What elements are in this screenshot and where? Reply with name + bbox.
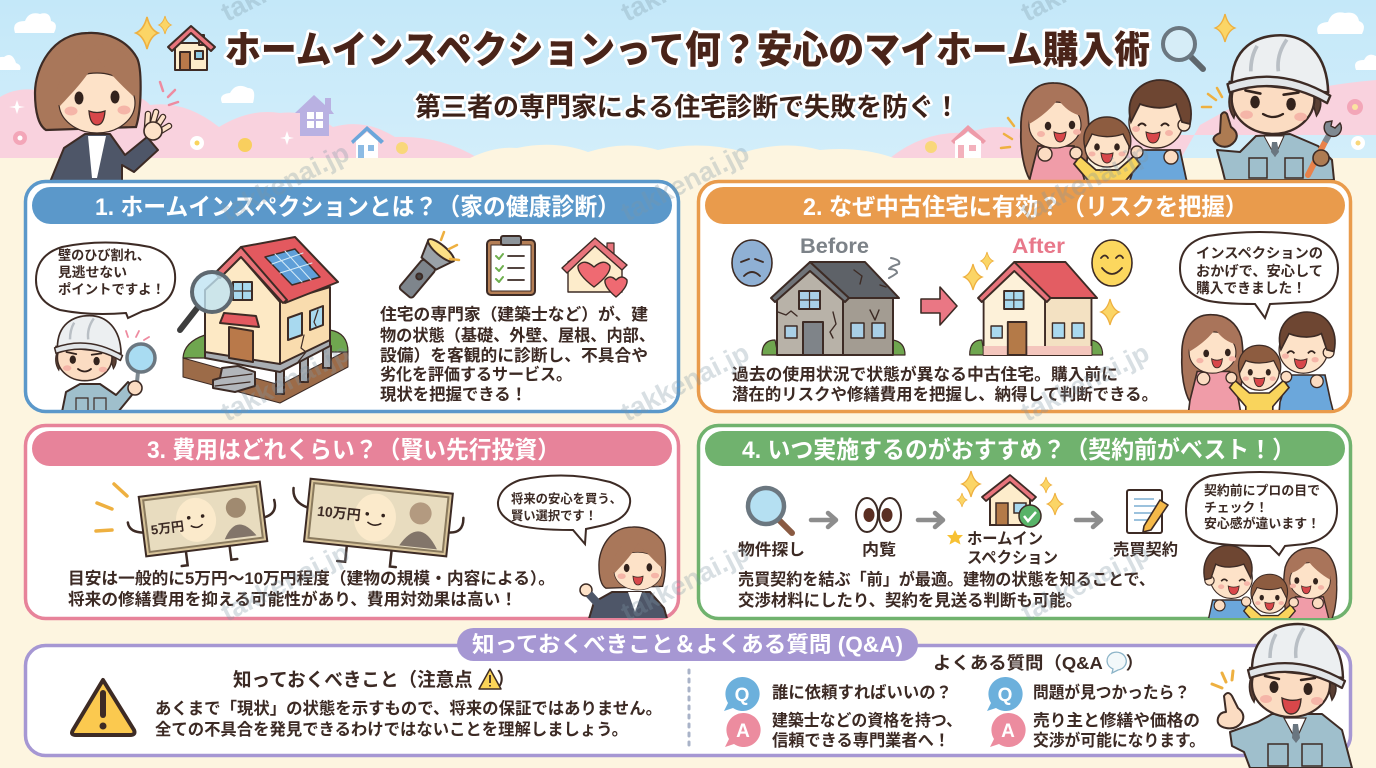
speech bubble: check before contract: チェック！ bbox=[1204, 500, 1268, 515]
notes text: あくまで「現状」の状態を示すもので、将来の保証ではありません。 bbox=[155, 699, 662, 718]
panel 4 heading bbox=[705, 431, 1345, 466]
speech bubble: purchased with confidence: おかげで、安心して bbox=[1196, 263, 1323, 279]
watermarks bbox=[216, 0, 1154, 627]
icon: magnifier by title bbox=[1163, 28, 1203, 69]
background house: blue bbox=[351, 126, 384, 158]
arrow 2 bbox=[918, 513, 943, 527]
panel 2 description text bbox=[732, 364, 1158, 404]
speech bubble: wise choice: 将来の安心を買う、 bbox=[511, 491, 622, 506]
watermarks: takkenai.jp bbox=[216, 337, 354, 427]
Q and A 2: Q bbox=[998, 685, 1012, 706]
banknote character: 100,000 yen bbox=[286, 477, 466, 574]
panel 2 heading: 2. なぜ中古住宅に有効？（リスクを把握） bbox=[803, 194, 1248, 221]
panel 3 heading bbox=[32, 431, 672, 466]
panel 1 description text: 現状を把握できる！ bbox=[380, 385, 527, 404]
subtitle: 第三者の専門家による住宅診断で失敗を防ぐ！ bbox=[415, 92, 960, 122]
character: inspector top right bbox=[1202, 35, 1341, 180]
banknote character: 50,000 yen: 5万円 bbox=[150, 519, 185, 538]
Q and A 2 bbox=[987, 677, 1205, 750]
speech bubble: cracks: 見逃せない bbox=[58, 264, 127, 280]
character: woman presenter bbox=[35, 33, 178, 182]
icon: house with hearts bbox=[562, 238, 627, 297]
speech bubble: cracks bbox=[36, 242, 175, 318]
panel 4 description text: 売買契約を結ぶ「前」が最適。建物の状態を知ることで、 bbox=[738, 569, 1155, 589]
character: inspector with magnifier bbox=[55, 316, 155, 412]
speech bubble: check before contract bbox=[1186, 472, 1337, 555]
watermarks: takkenai.jp bbox=[1016, 337, 1154, 427]
flow labels: 売買契約 bbox=[1113, 540, 1178, 559]
arrow 1 bbox=[811, 513, 836, 527]
panel 3 heading: 3. 費用はどれくらい？（賢い先行投資） bbox=[147, 437, 560, 464]
watermarks: takkenai.jp bbox=[616, 537, 754, 627]
character: woman in panel 3 bbox=[580, 527, 668, 622]
panel 1 description text: 物の状態（基礎、外壁、屋根、内部、 bbox=[380, 326, 655, 345]
panel 4 heading: 4. いつ実施するのがおすすめ？（契約前がベスト！） bbox=[742, 436, 1295, 464]
panel 1: what is home inspection bbox=[26, 182, 678, 412]
speech bubble: purchased with confidence: 購入できました！ bbox=[1196, 280, 1306, 296]
dotted divider bbox=[688, 670, 690, 746]
before label: Before bbox=[800, 235, 869, 258]
Q and A 2: 売り主と修繕や価格の bbox=[1033, 711, 1200, 730]
panel 4: when to do it bbox=[696, 424, 1352, 620]
sad face bbox=[732, 240, 772, 286]
panel 2: why effective for used homes bbox=[698, 182, 1350, 442]
speech bubble: purchased with confidence: インスペクションの bbox=[1196, 245, 1323, 261]
panel 1 heading: 1. ホームインスペクションとは？（家の健康診断） bbox=[95, 194, 620, 221]
icon: large warning triangle bbox=[72, 680, 134, 735]
watermarks: takkenai.jp bbox=[216, 137, 354, 227]
notes text: 全ての不具合を発見できるわけではないことを理解しましょう。 bbox=[155, 719, 628, 739]
panel 5 tab heading bbox=[457, 628, 918, 661]
icon: magnifier search bbox=[748, 488, 792, 533]
watermarks: takkenai.jp bbox=[1016, 537, 1154, 627]
notes text bbox=[155, 699, 662, 739]
character: family in panel 2 bbox=[1180, 311, 1336, 410]
icon: house by title bbox=[168, 26, 215, 70]
Q and A 1 bbox=[724, 677, 962, 750]
arrow: before to after bbox=[921, 287, 957, 325]
panel 1 description text: 設備）を客観的に診断し、不具合や bbox=[380, 345, 648, 365]
house after bbox=[970, 262, 1103, 355]
Q and A 1: Q bbox=[735, 685, 749, 706]
Q and A 1: 建築士などの資格を持つ、 bbox=[772, 710, 962, 730]
banknote character: 100,000 yen: 10万円 bbox=[316, 503, 362, 523]
character: family in panel 4 bbox=[1203, 545, 1338, 618]
flow labels: ホームイン bbox=[967, 530, 1043, 548]
Q and A 2: 問題が見つかったら？ bbox=[1033, 682, 1190, 702]
watermarks: takkenai.jp bbox=[616, 337, 754, 427]
panel 2 description text: 過去の使用状況で状態が異なる中古住宅。購入前に bbox=[732, 364, 1118, 384]
watermarks: takkenai.jp bbox=[1016, 137, 1154, 227]
Q and A 1: 信頼できる専門業者へ！ bbox=[772, 731, 950, 750]
background house: pink bbox=[951, 125, 986, 158]
speech bubble: wise choice: 賢い選択です！ bbox=[511, 508, 597, 523]
flow labels: 物件探し bbox=[738, 541, 805, 559]
character: family top right bbox=[1001, 80, 1198, 225]
speech bubble: purchased with confidence bbox=[1180, 232, 1338, 318]
panel 3 description text bbox=[68, 568, 555, 609]
icon: inspected house with check bbox=[957, 471, 1063, 527]
icon: checklist clipboard bbox=[487, 236, 535, 295]
happy face bbox=[1092, 240, 1132, 286]
icon: eyes bbox=[856, 498, 901, 532]
panel 3 description text: 将来の修繕費用を抑える可能性があり、費用対効果は高い！ bbox=[68, 589, 517, 609]
panel 1 description text bbox=[380, 304, 655, 404]
panel 3 description text: 目安は一般的に5万円〜10万円程度（建物の規模・内容による）。 bbox=[68, 568, 555, 588]
panel 4 description text: 交渉材料にしたり、契約を見送る判断も可能。 bbox=[738, 590, 1082, 610]
after label: After bbox=[1012, 235, 1065, 258]
title: ホームインスペクションって何？安心のマイホーム購入術 bbox=[225, 30, 1150, 72]
speech bubble: check before contract: 契約前にプロの目で bbox=[1204, 483, 1320, 498]
sparkles left of title bbox=[136, 16, 171, 49]
speech bubble: wise choice bbox=[498, 475, 630, 544]
panel 5 tab heading: 知っておくべきこと＆よくある質問 (Q&A) bbox=[472, 632, 903, 657]
panel 2 description text: 潜在的リスクや修繕費用を把握し、納得して判断できる。 bbox=[732, 385, 1158, 404]
background house: purple bbox=[295, 95, 334, 136]
flow labels: 内覧 bbox=[862, 540, 896, 559]
watermarks: takkenai.jp bbox=[216, 537, 354, 627]
Q and A 1: A bbox=[736, 721, 750, 742]
character: inspector bottom right bbox=[1212, 624, 1352, 768]
speech bubble: cracks: ポイントですよ！ bbox=[58, 282, 165, 297]
panel 5: notes and FAQ bbox=[26, 624, 1352, 768]
panel 1 heading bbox=[32, 187, 672, 224]
sparkles around after house bbox=[964, 252, 1119, 325]
panel 1 description text: 劣化を評価するサービス。 bbox=[380, 364, 572, 384]
banknote character: 50,000 yen bbox=[125, 480, 281, 572]
house before bbox=[762, 258, 905, 355]
panel 1 description text: 住宅の専門家（建築士など）が、建 bbox=[380, 304, 649, 324]
speech bubble: check before contract: 安心感が違います！ bbox=[1204, 516, 1320, 531]
Q and A 2: A bbox=[1001, 721, 1015, 742]
Q and A 2: 交渉が可能になります。 bbox=[1033, 730, 1205, 750]
notes heading: 知っておくべきこと（注意点 ） bbox=[233, 669, 515, 691]
speech bubble: cracks: 壁のひび割れ、 bbox=[58, 247, 150, 263]
panel 4 description text bbox=[738, 569, 1155, 610]
icon: contract and pencil bbox=[1127, 490, 1168, 533]
arrow 3 bbox=[1076, 513, 1101, 527]
FAQ heading: よくある質問（Q&A ） bbox=[933, 653, 1144, 673]
Q and A 1: 誰に依頼すればいいの？ bbox=[772, 683, 952, 702]
sparkle right of title bbox=[1215, 14, 1235, 42]
spark lines near 5-man note bbox=[96, 484, 127, 531]
flow labels bbox=[738, 530, 1178, 567]
panel 2 heading bbox=[705, 187, 1345, 224]
icon: flashlight bbox=[392, 232, 459, 304]
watermarks: takkenai.jp bbox=[616, 137, 754, 227]
flow labels: スペクション bbox=[967, 549, 1058, 567]
illustration: house on foundation bbox=[180, 237, 348, 403]
panel 3: cost bbox=[26, 426, 678, 622]
